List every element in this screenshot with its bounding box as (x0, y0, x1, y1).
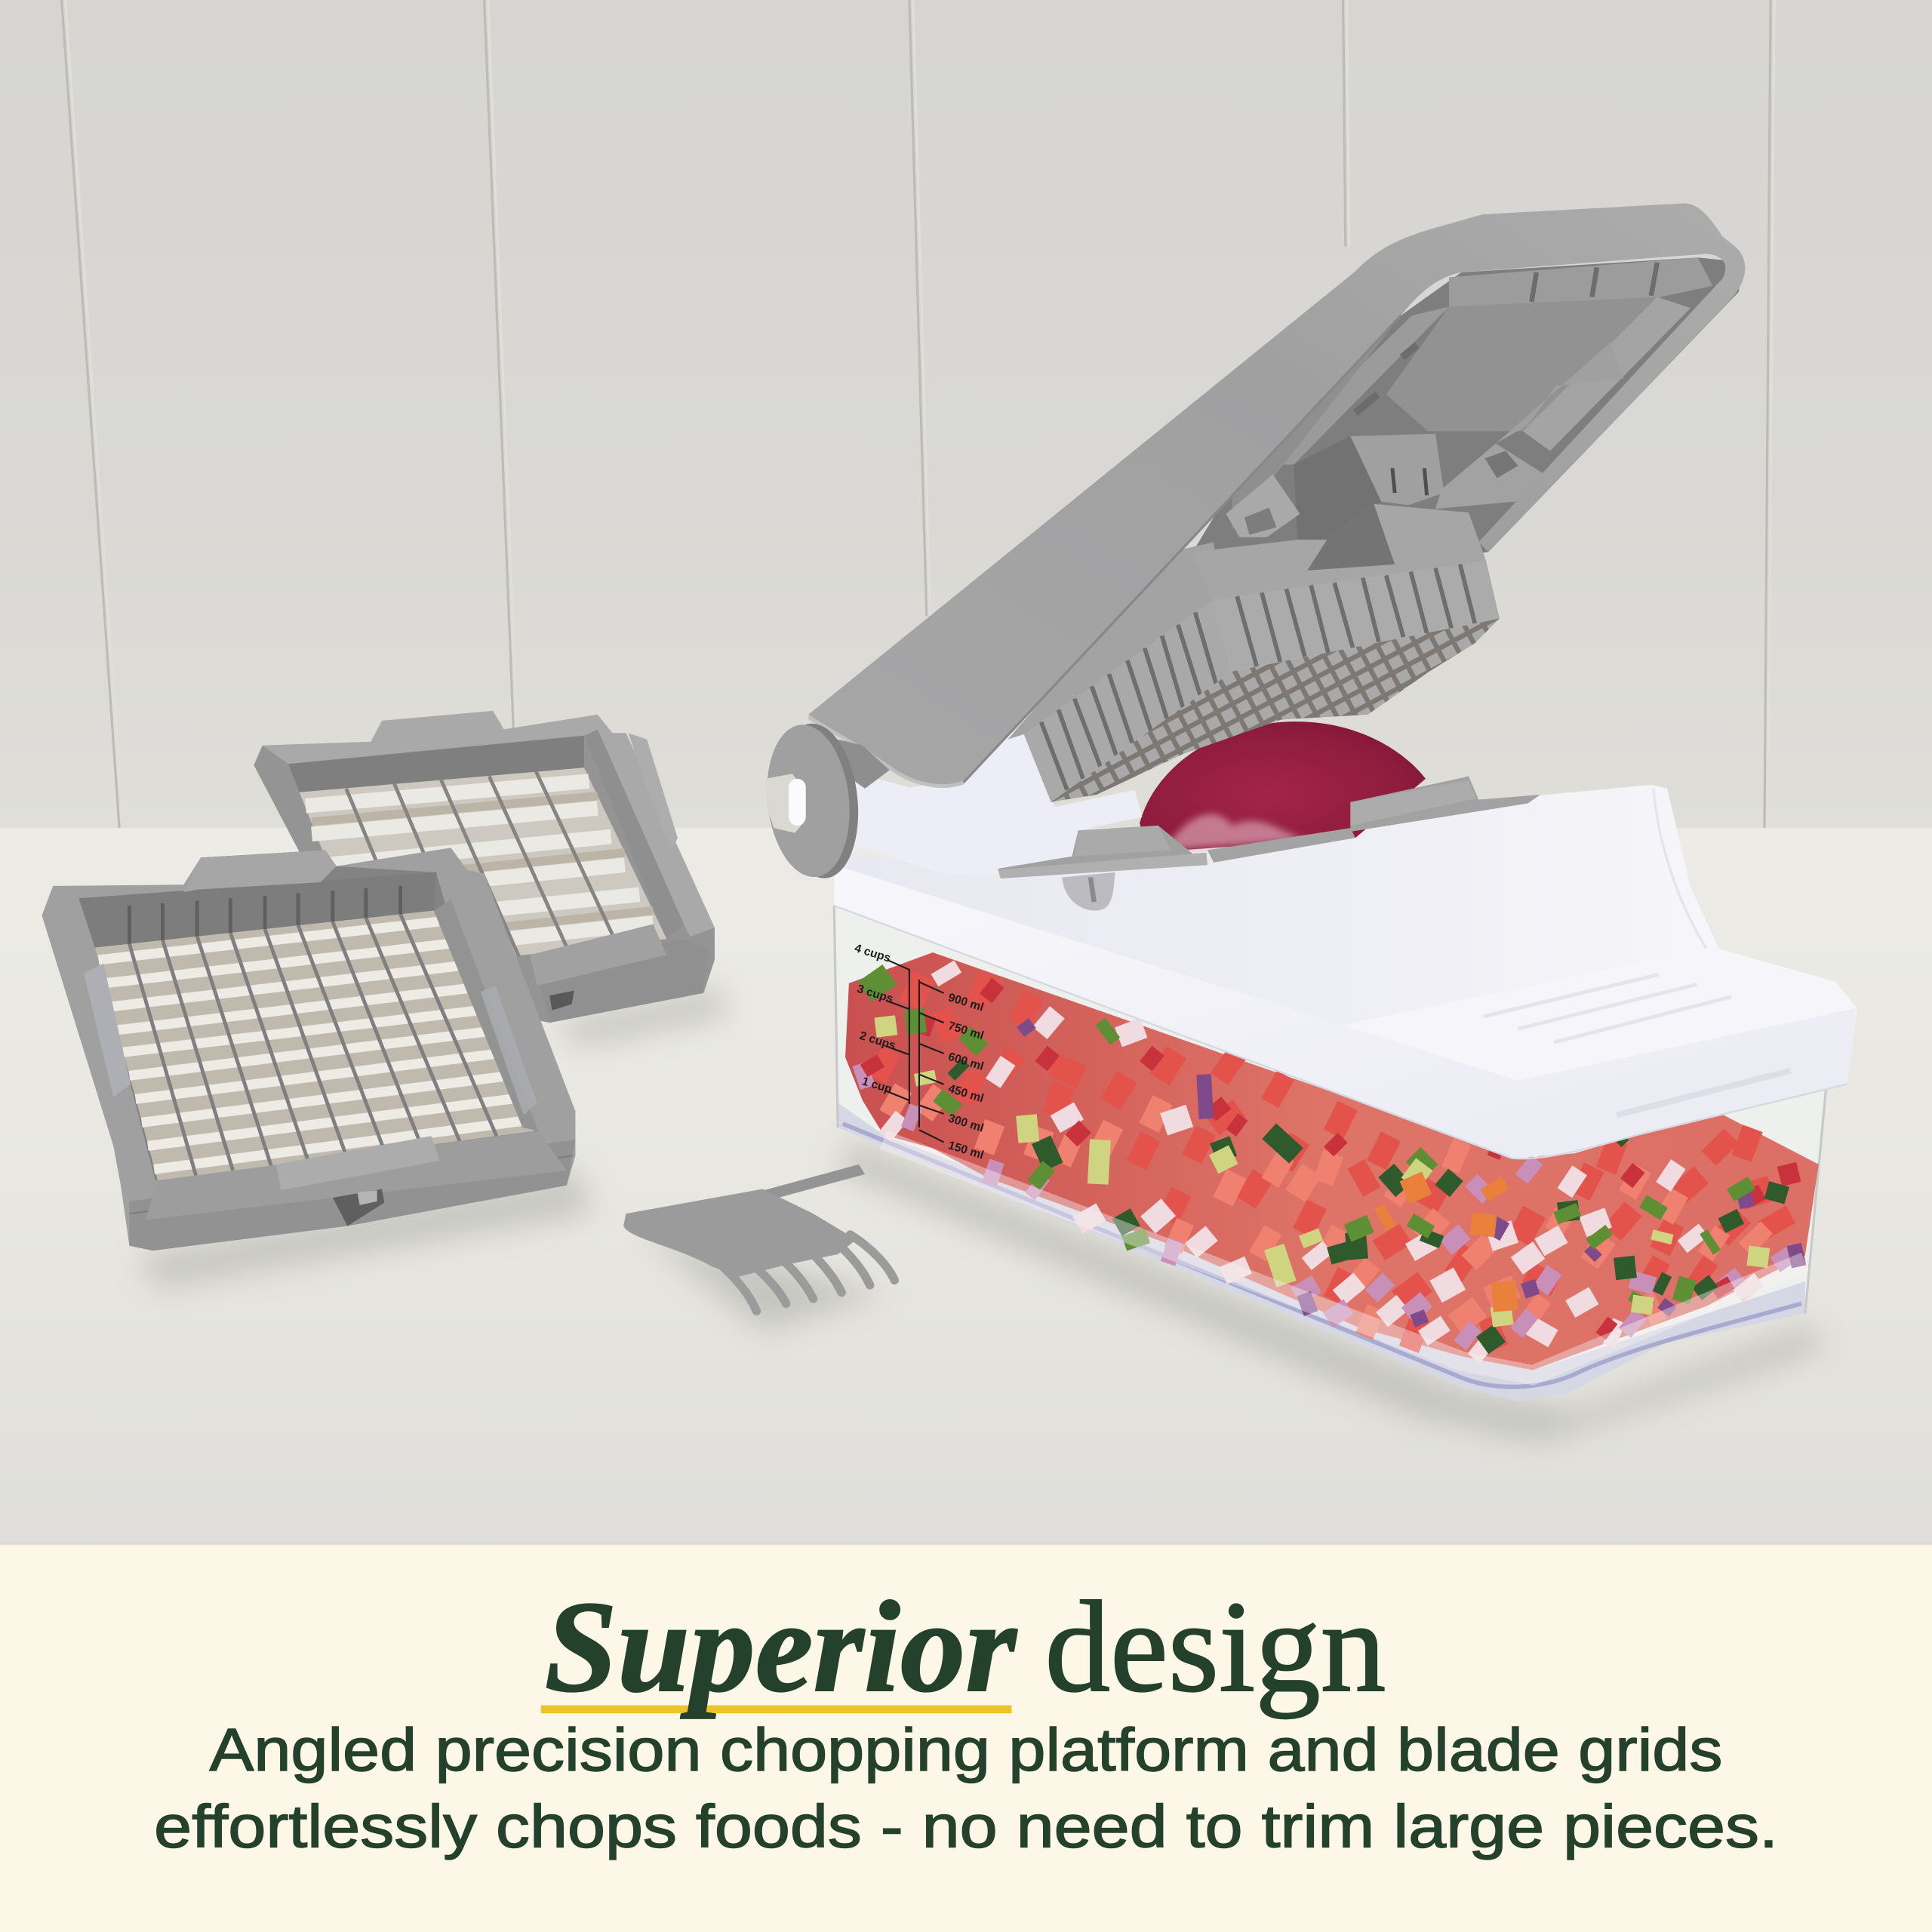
white hopper body (834, 785, 1857, 1158)
heading second word: design (1044, 1575, 1386, 1719)
chopper lid (808, 203, 1745, 786)
heading: Superior (545, 1575, 1017, 1719)
measurement scale printed on container: 300 ml (946, 1112, 985, 1135)
inner back plate (1386, 297, 1661, 431)
left notched wall (1260, 307, 1449, 465)
blade tips (1051, 619, 1500, 802)
measurement scale printed on container: 4 cups (853, 942, 892, 965)
measurement scale printed on container (853, 942, 985, 1162)
right wall (1523, 297, 1690, 451)
measurement scale printed on container: 600 ml (946, 1051, 985, 1073)
right post (1435, 444, 1552, 509)
dark channel (1294, 436, 1381, 540)
photo background: wall (0, 0, 1932, 830)
blade grid: front (42, 848, 575, 1251)
measurement scale printed on container: 900 ml (946, 991, 985, 1014)
pusher comb (623, 1164, 894, 1311)
caption band (0, 1545, 1932, 1932)
onion (1140, 721, 1426, 853)
body text line 1: Angled precision chopping platform and blade grids (210, 1716, 1722, 1783)
heading underline (541, 1706, 1011, 1713)
clear container (834, 906, 1826, 1401)
front lip (834, 865, 1857, 1158)
tray top surface (1343, 949, 1857, 1081)
chopper blade fins (1024, 561, 1500, 802)
lid underside (1192, 257, 1745, 579)
measurement scale printed on container: 750 ml (946, 1020, 985, 1042)
square post (1226, 475, 1300, 537)
blade grid: back (254, 711, 715, 1023)
hinge disc (760, 719, 890, 882)
lid outer surface (808, 203, 1745, 786)
fin faces (1213, 561, 1500, 672)
measurement scale printed on container: 450 ml (946, 1082, 985, 1105)
measurement scale printed on container: 1 cup (860, 1075, 894, 1096)
measurement scale printed on container: 150 ml (946, 1139, 985, 1162)
block left face (1008, 542, 1220, 740)
soft shadows on table (136, 986, 1823, 1441)
body text line 2: effortlessly chops foods - no need to trim large pieces. (154, 1792, 1778, 1860)
white panel under lid (855, 730, 1142, 875)
measurement scale printed on container: 2 cups (858, 1029, 897, 1053)
photo background: table (0, 828, 1932, 1545)
top wall ribs (1449, 257, 1712, 307)
chopped vegetables inside container (845, 952, 1819, 1375)
slide plate with grey handles (998, 777, 1540, 911)
measurement scale printed on container: 3 cups (856, 983, 894, 1005)
block top (1192, 504, 1500, 619)
centre tab (1350, 434, 1444, 505)
